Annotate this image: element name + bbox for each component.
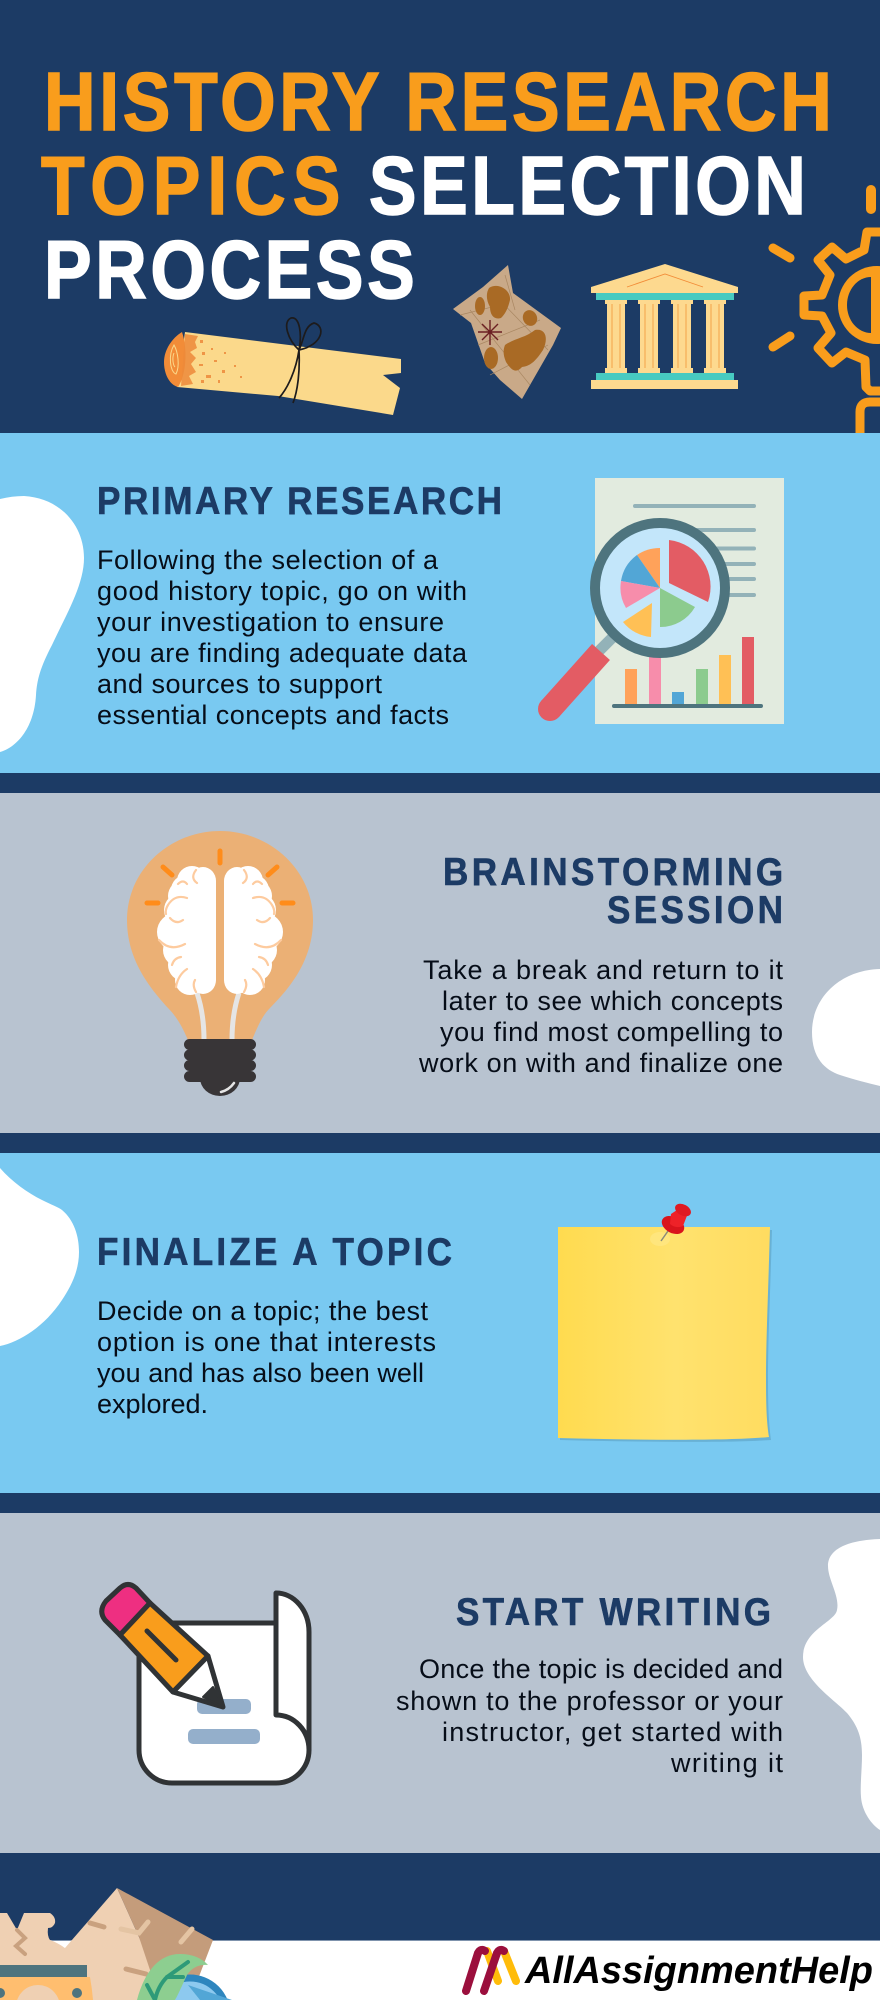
icon: sticky note with pin (558, 1201, 772, 1442)
text: start writing body: Once the topic is decided and (419, 1654, 783, 1684)
panel: finalize a topic (0, 1153, 880, 1493)
text: primary research body: your investigation to ensure (97, 607, 444, 637)
title (41, 56, 832, 316)
text: finalize body: option is one that interests (97, 1327, 436, 1357)
title: HISTORY RESEARCH (44, 56, 832, 148)
icon: lightbulb with brain (127, 831, 313, 1096)
illustration: pyramid, vase, leaf and globe (0, 1888, 232, 2000)
heading: brainstorming session: BRAINSTORMING (443, 849, 783, 893)
text: brainstorming body: Take a break and return to it (423, 955, 783, 985)
text: start writing body: shown to the professor or your (396, 1686, 783, 1716)
text: finalize body (97, 1296, 436, 1419)
text: start writing body: writing it (670, 1748, 783, 1778)
text: primary research body: you are finding adequate data (97, 638, 468, 668)
icon: classical temple (591, 264, 738, 389)
heading: brainstorming session (443, 849, 783, 931)
text: primary research body (97, 545, 468, 730)
icon: gear with rays (773, 190, 880, 440)
heading: brainstorming session: SESSION (607, 887, 783, 931)
text: primary research body: Following the selection of a (97, 545, 439, 575)
icon: magnifier over report (538, 478, 784, 724)
icon: parchment scroll (164, 318, 401, 415)
title: SELECTION (369, 140, 806, 232)
title: TOPICS (41, 140, 340, 232)
text: primary research body: essential concepts and facts (97, 700, 449, 730)
text: brainstorming body (418, 955, 783, 1078)
text: start writing body: instructor, get started with (442, 1717, 783, 1747)
text: brainstorming body: later to see which concepts (442, 986, 783, 1016)
text: start writing body (396, 1654, 783, 1778)
text: finalize body: Decide on a topic; the best (97, 1296, 428, 1326)
text: finalize body: you and has also been well (97, 1358, 424, 1388)
text: primary research body: good history topic, go on with (97, 576, 467, 606)
text: brainstorming body: you find most compelling to (440, 1017, 783, 1047)
heading: finalize a topic: FINALIZE A TOPIC (97, 1229, 452, 1273)
title: PROCESS (44, 224, 415, 316)
heading: start writing: START WRITING (456, 1589, 771, 1633)
icon: old map (453, 265, 561, 399)
panel: primary research (0, 433, 880, 773)
panel: start writing (0, 1513, 880, 1853)
logo: AllAssignmentHelp: AllAssignmentHelp (524, 1950, 873, 1992)
icon: pencil and paper (102, 1584, 309, 1783)
panel: brainstorming session (0, 793, 880, 1133)
text: primary research body: and sources to support (97, 669, 382, 699)
heading: primary research: PRIMARY RESEARCH (97, 478, 502, 522)
footer band (0, 1940, 880, 2000)
text: brainstorming body: work on with and finalize one (418, 1048, 783, 1078)
text: finalize body: explored. (97, 1389, 208, 1419)
